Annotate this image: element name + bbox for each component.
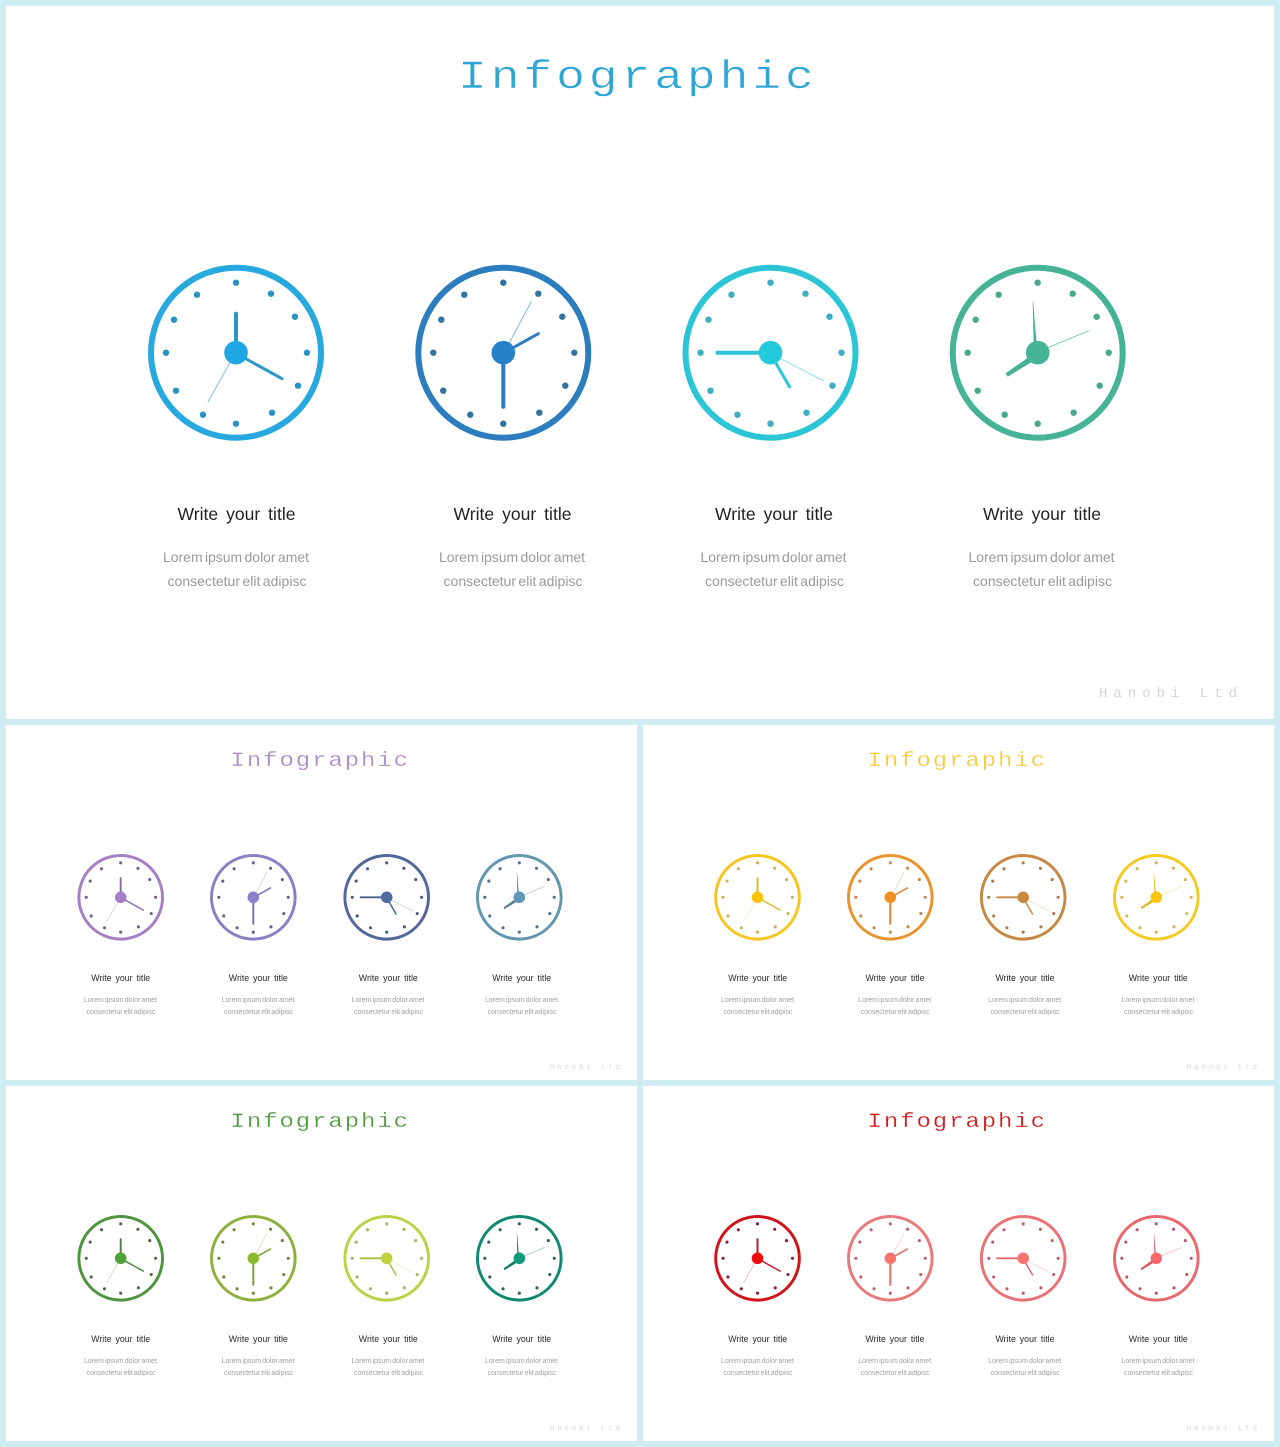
text block 2: consectetur elit adipisc bbox=[224, 1370, 294, 1377]
text block 3: Write your title bbox=[996, 973, 1055, 983]
text block 1: consectetur elit adipisc bbox=[86, 1009, 156, 1016]
text block 3 bbox=[988, 973, 1061, 1016]
text block 2: Lorem ipsum dolor amet bbox=[858, 1358, 931, 1365]
icon: purple clock 2 bbox=[211, 855, 295, 939]
text block 3: consectetur elit adipisc bbox=[354, 1009, 424, 1016]
text block 1 bbox=[84, 973, 157, 1016]
title: green: Infographic bbox=[230, 1111, 410, 1133]
text block 1 bbox=[163, 504, 309, 589]
text block 1: Lorem ipsum dolor amet bbox=[163, 549, 309, 565]
title: yellow: Infographic bbox=[868, 750, 1047, 772]
text block 1: consectetur elit adipisc bbox=[86, 1370, 156, 1377]
footer brand: Hanobi Ltd bbox=[550, 1064, 623, 1072]
icon: purple clock 4 bbox=[477, 855, 561, 939]
text block 3: consectetur elit adipisc bbox=[705, 573, 844, 589]
text block 3 bbox=[700, 504, 847, 589]
title: red: Infographic bbox=[868, 1111, 1047, 1133]
text block 4: Lorem ipsum dolor amet bbox=[968, 549, 1115, 565]
text block 4: consectetur elit adipisc bbox=[488, 1370, 557, 1377]
text block 3: Write your title bbox=[996, 1334, 1055, 1344]
text block 1: Write your title bbox=[91, 973, 150, 983]
text block 1: Write your title bbox=[728, 1334, 787, 1344]
text block 1: Lorem ipsum dolor amet bbox=[721, 1358, 794, 1365]
text block 2: Lorem ipsum dolor amet bbox=[222, 997, 295, 1004]
text block 4: Write your title bbox=[1129, 1334, 1188, 1344]
icon: red clock 2 bbox=[848, 1216, 932, 1300]
text block 2: Write your title bbox=[454, 504, 572, 524]
text block 1: Lorem ipsum dolor amet bbox=[721, 997, 794, 1004]
text block 3: Lorem ipsum dolor amet bbox=[352, 1358, 425, 1365]
text block 2: consectetur elit adipisc bbox=[861, 1370, 930, 1377]
text block 3 bbox=[988, 1334, 1061, 1377]
panel: green slide bbox=[6, 1086, 637, 1441]
icon: yellow clock 4 bbox=[1114, 855, 1198, 939]
text block 3: consectetur elit adipisc bbox=[354, 1370, 424, 1377]
text block 2 bbox=[222, 1334, 295, 1377]
icon: red clock 4 bbox=[1114, 1216, 1198, 1300]
text block 3: Lorem ipsum dolor amet bbox=[700, 549, 847, 565]
text block 4: Lorem ipsum dolor amet bbox=[485, 997, 558, 1004]
panel: main blue slide bbox=[6, 6, 1274, 719]
text block 4: consectetur elit adipisc bbox=[973, 573, 1112, 589]
text block 1: Lorem ipsum dolor amet bbox=[84, 1358, 157, 1365]
text block 1: consectetur elit adipisc bbox=[724, 1009, 793, 1016]
icon: blue clock 2 bbox=[418, 268, 588, 438]
text block 2: Write your title bbox=[229, 1334, 288, 1344]
icon: green clock 2 bbox=[211, 1216, 295, 1300]
text block 2: Lorem ipsum dolor amet bbox=[858, 997, 931, 1004]
icon: blue clock 1 bbox=[151, 268, 321, 438]
text block 4: consectetur elit adipisc bbox=[1124, 1370, 1194, 1377]
text block 2 bbox=[439, 504, 585, 589]
icon: blue clock 3 bbox=[686, 268, 856, 438]
text block 3: Lorem ipsum dolor amet bbox=[988, 997, 1061, 1004]
icon: green clock 3 bbox=[345, 1216, 429, 1300]
text block 1 bbox=[84, 1334, 157, 1377]
footer brand: Hanobi Ltd bbox=[1187, 1064, 1260, 1072]
text block 2: Write your title bbox=[866, 973, 925, 983]
panel: purple slide bbox=[6, 725, 637, 1080]
panel: yellow slide bbox=[643, 725, 1274, 1080]
footer brand: Hanobi Ltd bbox=[1099, 686, 1243, 702]
text block 3 bbox=[352, 973, 425, 1016]
icon: yellow clock 1 bbox=[716, 855, 799, 939]
text block 3: Write your title bbox=[359, 1334, 418, 1344]
icon: blue clock 4 bbox=[953, 268, 1123, 438]
text block 4 bbox=[968, 504, 1115, 589]
text block 3: Write your title bbox=[359, 973, 418, 983]
text block 1 bbox=[721, 1334, 794, 1377]
text block 4: Write your title bbox=[1129, 973, 1188, 983]
icon: red clock 1 bbox=[716, 1216, 799, 1300]
text block 4: consectetur elit adipisc bbox=[1124, 1009, 1194, 1016]
text block 4: Write your title bbox=[492, 973, 551, 983]
text block 2: consectetur elit adipisc bbox=[224, 1009, 294, 1016]
title: blue: Infographic bbox=[458, 55, 818, 101]
text block 2 bbox=[222, 973, 295, 1016]
text block 3: Write your title bbox=[715, 504, 833, 524]
text block 3: Lorem ipsum dolor amet bbox=[988, 1358, 1061, 1365]
text block 4 bbox=[1122, 973, 1195, 1016]
text block 4: Write your title bbox=[492, 1334, 551, 1344]
icon: yellow clock 2 bbox=[848, 855, 932, 939]
text block 1 bbox=[721, 973, 794, 1016]
text block 1: Write your title bbox=[91, 1334, 150, 1344]
footer brand: Hanobi Ltd bbox=[1187, 1425, 1260, 1433]
text block 1: Write your title bbox=[728, 973, 787, 983]
text block 1: Write your title bbox=[178, 504, 296, 524]
text block 3 bbox=[352, 1334, 425, 1377]
text block 2: Lorem ipsum dolor amet bbox=[222, 1358, 295, 1365]
text block 4: Write your title bbox=[983, 504, 1101, 524]
text block 4 bbox=[485, 973, 558, 1016]
footer brand: Hanobi Ltd bbox=[550, 1425, 623, 1433]
panel: red slide bbox=[643, 1086, 1274, 1441]
icon: red clock 3 bbox=[981, 1216, 1065, 1300]
icon: yellow clock 3 bbox=[981, 855, 1065, 939]
icon: green clock 1 bbox=[79, 1216, 163, 1300]
text block 2 bbox=[858, 973, 931, 1016]
text block 2: Write your title bbox=[229, 973, 288, 983]
text block 1: consectetur elit adipisc bbox=[724, 1370, 793, 1377]
text block 4: consectetur elit adipisc bbox=[488, 1009, 557, 1016]
text block 4: Lorem ipsum dolor amet bbox=[1122, 997, 1195, 1004]
text block 2 bbox=[858, 1334, 931, 1377]
text block 3: consectetur elit adipisc bbox=[991, 1009, 1060, 1016]
text block 1: Lorem ipsum dolor amet bbox=[84, 997, 157, 1004]
icon: purple clock 1 bbox=[79, 855, 163, 939]
text block 2: consectetur elit adipisc bbox=[861, 1009, 930, 1016]
text block 3: Lorem ipsum dolor amet bbox=[352, 997, 425, 1004]
text block 4: Lorem ipsum dolor amet bbox=[1122, 1358, 1195, 1365]
text block 2: consectetur elit adipisc bbox=[444, 573, 582, 589]
text block 4: Lorem ipsum dolor amet bbox=[485, 1358, 558, 1365]
text block 4 bbox=[1122, 1334, 1195, 1377]
title: purple: Infographic bbox=[230, 750, 410, 772]
icon: purple clock 3 bbox=[345, 855, 429, 939]
icon: green clock 4 bbox=[477, 1216, 561, 1300]
text block 2: Lorem ipsum dolor amet bbox=[439, 549, 585, 565]
text block 3: consectetur elit adipisc bbox=[991, 1370, 1060, 1377]
text block 2: Write your title bbox=[866, 1334, 925, 1344]
text block 4 bbox=[485, 1334, 558, 1377]
text block 1: consectetur elit adipisc bbox=[168, 573, 306, 589]
